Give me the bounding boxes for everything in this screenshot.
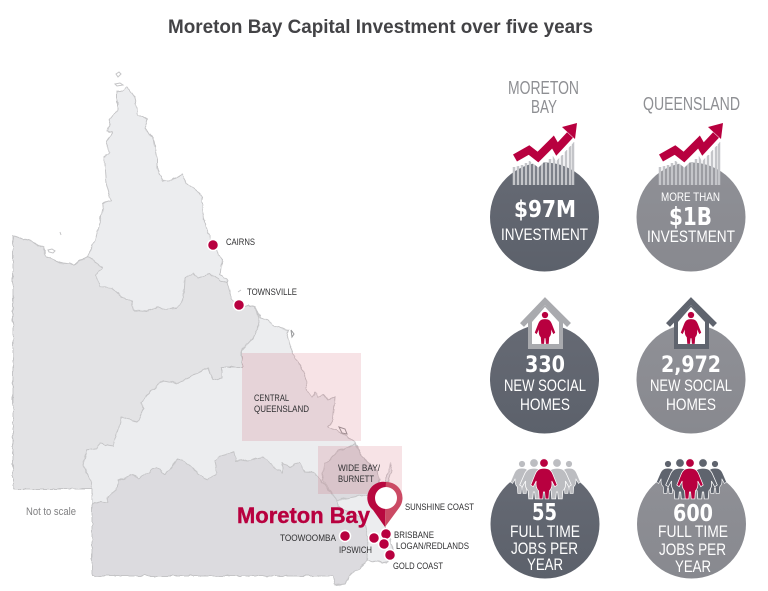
map: western region bbox=[13, 236, 260, 489]
circle bbox=[637, 470, 746, 578]
caption: HOMES bbox=[666, 395, 716, 414]
map: regions bbox=[13, 87, 393, 585]
marker: Gold Coast: GOLD COAST bbox=[393, 561, 443, 572]
caption bbox=[658, 522, 728, 576]
icon: crowd of people bbox=[656, 459, 727, 499]
caption bbox=[510, 522, 580, 574]
marker: Townsville: TOWNSVILLE bbox=[247, 287, 297, 298]
map: central coast islands bbox=[291, 330, 347, 434]
map of Queensland bbox=[13, 72, 474, 585]
value: $97M bbox=[514, 197, 576, 223]
icon: location pin bbox=[367, 482, 403, 527]
map: Fraser Island bbox=[384, 463, 392, 484]
caption bbox=[650, 376, 732, 414]
value: 330 bbox=[525, 353, 565, 378]
stat: Moreton Bay social homes bbox=[490, 301, 599, 434]
caption: NEW SOCIAL bbox=[650, 376, 732, 395]
label: Moreton Bay: Moreton Bay bbox=[237, 503, 371, 528]
label: Wide Bay Burnett: WIDE BAY/ bbox=[338, 463, 380, 474]
stat: Queensland investment bbox=[636, 123, 746, 272]
value: 55 bbox=[532, 500, 557, 526]
label: Not to scale: Not to scale bbox=[26, 506, 76, 518]
caption: FULL TIME bbox=[510, 522, 580, 541]
marker: Ipswich bbox=[339, 532, 380, 556]
stat: Moreton Bay jobs bbox=[490, 459, 600, 578]
map: Wide Bay hinterland bbox=[322, 443, 380, 500]
caption: JOBS PER bbox=[659, 540, 726, 559]
qualifier: MORE THAN bbox=[661, 190, 720, 204]
stat: Queensland social homes bbox=[636, 301, 746, 434]
caption: INVESTMENT bbox=[647, 227, 735, 246]
stat: Queensland jobs bbox=[637, 459, 746, 578]
marker: Gold Coast bbox=[384, 550, 443, 572]
value: $1B bbox=[669, 202, 712, 231]
marker: Cairns: CAIRNS bbox=[226, 237, 255, 248]
marker: Ipswich: IPSWICH bbox=[339, 545, 372, 556]
heading: Moreton Bay column bbox=[508, 78, 579, 117]
map: northern islands bbox=[48, 72, 241, 292]
marker: Cairns bbox=[208, 237, 255, 250]
caption: YEAR bbox=[675, 557, 711, 576]
circle bbox=[490, 162, 599, 272]
caption: JOBS PER bbox=[511, 539, 578, 558]
circle bbox=[490, 324, 599, 434]
caption: INVESTMENT bbox=[501, 225, 588, 244]
circle bbox=[636, 162, 746, 272]
label: Central Queensland: CENTRAL bbox=[254, 393, 289, 404]
marker: Townsville bbox=[234, 287, 297, 310]
caption: FULL TIME bbox=[658, 522, 728, 541]
caption: HOMES bbox=[520, 395, 570, 414]
heading: Moreton Bay column: MORETON bbox=[508, 78, 579, 98]
value: 600 bbox=[673, 501, 713, 527]
map: southern region bbox=[92, 452, 368, 585]
caption bbox=[504, 376, 586, 414]
marker: Logan/Redlands bbox=[378, 538, 469, 552]
icon: crowd of people bbox=[510, 459, 581, 499]
marker: Brisbane: BRISBANE bbox=[394, 530, 434, 541]
label: Wide Bay Burnett: BURNETT bbox=[338, 474, 374, 485]
caption: NEW SOCIAL bbox=[504, 376, 586, 395]
marker: Brisbane bbox=[380, 528, 434, 541]
value: 2,972 bbox=[661, 353, 721, 378]
circle bbox=[490, 470, 600, 578]
icon: rising bars and arrow bbox=[514, 123, 577, 185]
heading: Queensland column: QUEENSLAND bbox=[643, 94, 740, 114]
label: Central Queensland: QUEENSLAND bbox=[254, 404, 309, 415]
marker: Toowoomba: TOOWOOMBA bbox=[280, 533, 337, 544]
map: state base and coast bbox=[13, 87, 393, 585]
region box: Central Queensland bbox=[242, 353, 361, 441]
circle bbox=[636, 324, 746, 434]
region box: Wide Bay Burnett bbox=[318, 446, 402, 494]
marker: Logan/Redlands: LOGAN/REDLANDS bbox=[396, 541, 469, 552]
label: Central Queensland bbox=[254, 393, 309, 415]
label: Wide Bay Burnett bbox=[338, 463, 380, 485]
heading: Moreton Bay column: BAY bbox=[531, 97, 557, 117]
label: Sunshine Coast: SUNSHINE COAST bbox=[405, 502, 474, 513]
title: Moreton Bay Capital Investment over five years bbox=[168, 17, 593, 38]
icon: rising bars and arrow bbox=[660, 123, 723, 185]
stat: Moreton Bay investment bbox=[490, 123, 599, 272]
icon: house with person bbox=[522, 301, 569, 349]
icon: house with person bbox=[668, 301, 715, 349]
caption: YEAR bbox=[527, 555, 563, 574]
